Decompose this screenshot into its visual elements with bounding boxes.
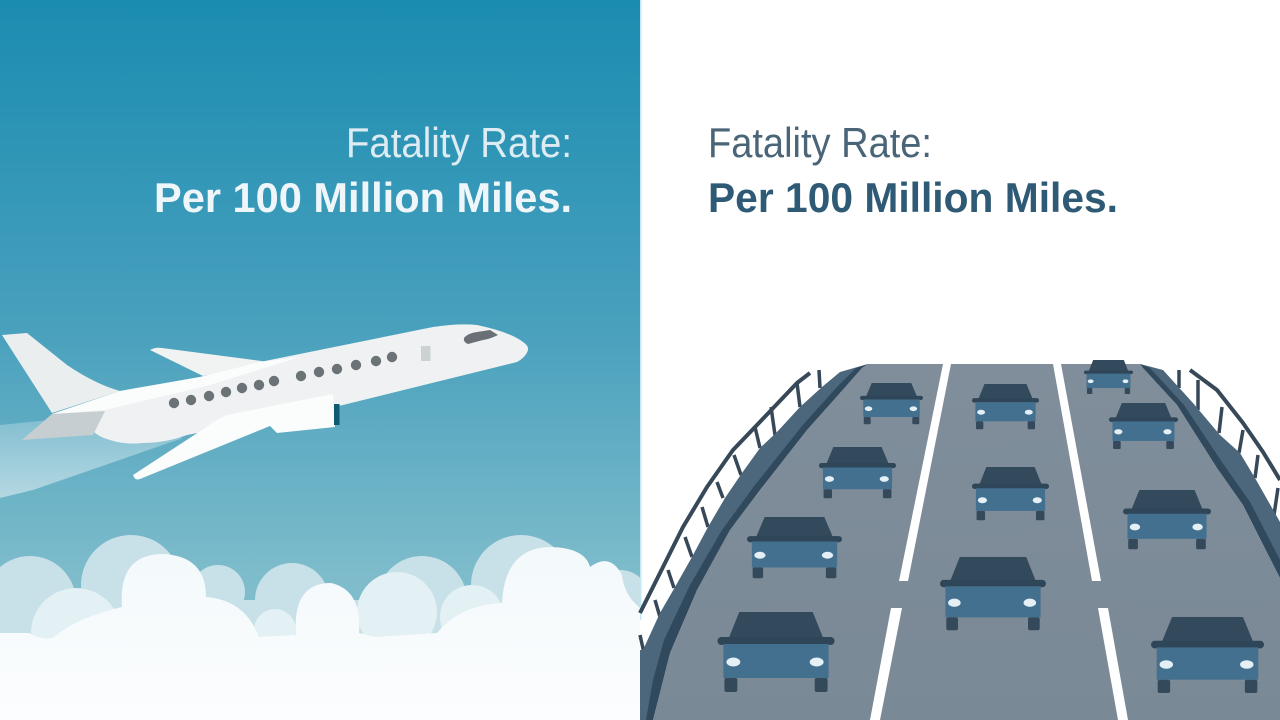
- middle cloud layer: [31, 572, 504, 678]
- right road barrier: [1140, 364, 1280, 578]
- left road barrier: [640, 364, 868, 720]
- contrail: [0, 420, 183, 498]
- car 8: [1084, 360, 1133, 394]
- car 7: [940, 557, 1046, 630]
- heading: car fatality rate: Fatality Rate:: [708, 119, 932, 166]
- car 3: [747, 517, 842, 578]
- back cloud layer: [0, 535, 650, 660]
- car 2: [819, 447, 896, 498]
- heading: plane fatality rate: Per 100 Million Miles.: [154, 174, 572, 221]
- cockpit window: [464, 330, 498, 344]
- lane markings: [870, 364, 1128, 720]
- panel: highway (car side): [640, 0, 1280, 720]
- left guard rail: [640, 370, 820, 653]
- heading: car fatality rate: Per 100 Million Miles.: [708, 174, 1118, 221]
- fuselage top highlight: [52, 357, 300, 414]
- airplane: [2, 324, 528, 480]
- tail fin: [2, 333, 120, 413]
- right guard rail: [1179, 370, 1280, 515]
- engine edge: [334, 404, 340, 425]
- door: [421, 346, 430, 361]
- car 6: [972, 467, 1049, 520]
- road surface: [653, 364, 1280, 720]
- heading: car fatality rate: [708, 119, 1118, 221]
- heading: plane fatality rate: [154, 119, 572, 221]
- car 11: [1151, 617, 1264, 693]
- near wing: [133, 394, 335, 480]
- car 4: [717, 612, 835, 692]
- car 10: [1123, 490, 1211, 549]
- far wing: [150, 348, 269, 376]
- car 9: [1109, 403, 1178, 449]
- heading: plane fatality rate: Fatality Rate:: [346, 119, 572, 166]
- fuselage: [52, 324, 528, 444]
- panel: sky (plane side): [0, 0, 650, 720]
- tail stabilizer: [22, 411, 105, 440]
- car 5: [972, 384, 1039, 429]
- car 1: [860, 383, 923, 424]
- front cloud layer: [0, 547, 640, 720]
- windows: [169, 352, 397, 408]
